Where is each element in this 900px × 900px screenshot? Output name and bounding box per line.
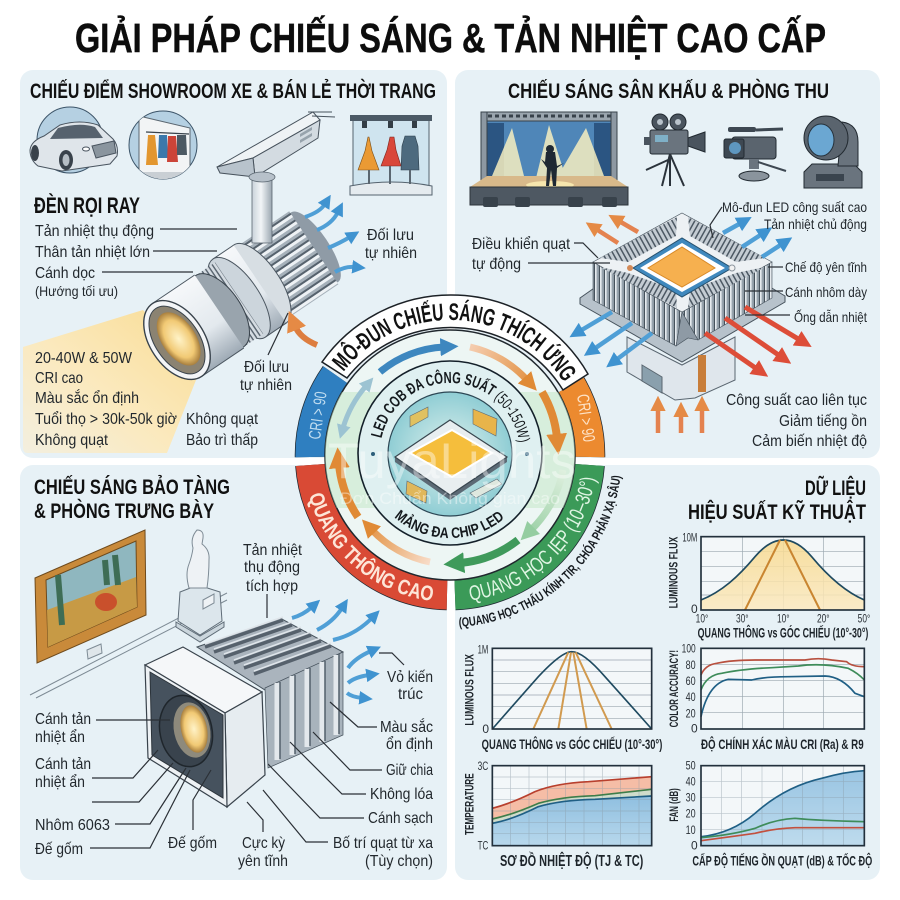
labels: fixture: yên tĩnh [238,853,288,870]
ring segment: narrow optics green [455,465,590,595]
watermark tint [323,392,577,508]
labels: track light: tự nhiên [365,245,417,262]
chart: fan noise: 40 [686,775,696,789]
labels: track light: Màu sắc ổn định [35,388,139,407]
labels: track light: Thân tản nhiệt lớn [35,244,150,261]
text: high flux: QUANG THÔNG CAO [307,493,433,600]
labels: fixture: Màu sắc [380,717,433,736]
wall line [30,593,227,698]
chart: fan noise [667,759,872,869]
labels: fixture: (Tùy chọn) [365,853,433,870]
chart: color accuracy: 20 [686,706,696,720]
inner disc [325,330,575,580]
ring arrow: orange upper [470,347,527,380]
heading: museum: & PHÒNG TRƯNG BÀY [34,499,214,523]
banner: adaptive module [322,295,588,390]
panel: showroom and retail [20,70,447,458]
text: module title: MÔ-ĐUN CHIẾU SÁNG THÍCH ỨNG [332,300,576,380]
arrows: rising convection [305,204,355,272]
chart: temperature [463,759,652,870]
labels: heat sink: Giảm tiếng ồn [779,413,867,430]
text: CRI left: CRI > 90 [305,390,331,441]
icon: luxury car [30,107,118,173]
illustration: heat sink module [580,213,785,400]
labels: fixture: Nhôm 6063 [35,817,110,834]
chart: luminous flux left [463,642,662,752]
heading: museum [34,476,230,523]
labels: heat sink: Chế độ yên tĩnh [785,259,867,275]
icon: film camera [644,114,705,186]
heading: museum: CHIẾU SÁNG BẢO TÀNG [34,476,230,499]
labels: track light: Đối lưu [367,227,414,244]
text: multi-chip array: MẢNG ĐA CHIP LED [394,510,503,538]
chart: luminous flux top: 20° [817,611,830,625]
illustration: architectural fixture [145,617,343,807]
chart: luminous flux top: 0 [691,602,698,616]
chart: fan noise: 20 [686,807,696,821]
arrows: exhaust orange [596,221,702,433]
labels: fixture: Đế gốm [35,841,83,858]
chart: temperature: SƠ ĐỒ NHIỆT ĐỘ (TJ & TC) [500,851,643,870]
labels: fixture: Bố trí quạt từ xa [333,835,433,852]
labels: track light: Tuổi thọ > 30k-50k giờ [35,410,177,428]
icon: concert stage [470,112,628,207]
ring segment: CRI orange [571,385,590,457]
labels: fixture: Cánh sạch [368,810,433,827]
panel: technical performance data [455,465,880,880]
labels: track light: CRI cao [35,370,83,387]
chart: luminous flux left: 0 [482,722,489,736]
watermark text: TuyaLights [328,433,576,489]
heading: data [688,476,866,524]
chart: color accuracy: COLOR ACCURACY! [667,650,681,727]
labels: track light: Cánh dọc [35,265,95,282]
charts group [463,530,872,870]
text: narrow optics: QUANG HỌC IẸP (10–30°) [470,478,599,604]
ring segment: CRI blue [310,375,335,457]
text: optics note: (QUANG HỌC THẤU KÍNH TIR, CHÓA PHẢN XẠ SÂU) [459,476,624,630]
ring arrow: orange right [542,392,557,438]
heading: stage: CHIẾU SÁNG SÂN KHẤU & PHÒNG THU [508,79,829,103]
icon: video camera [724,127,786,181]
labels: heat sink: Tản nhiệt chủ động [764,216,867,232]
icon: display case with mannequins [350,115,432,195]
labels: track light [34,193,417,449]
labels: track light: (Hướng tối ưu) [35,283,118,299]
chart: color accuracy [667,642,864,752]
chart: color accuracy: 80 [686,658,696,672]
chart: temperature: TC [478,839,489,853]
labels: fixture: trúc [398,686,423,703]
icon: clothing store [129,111,198,180]
labels: heat sink: Cảm biến nhiệt độ [752,433,867,450]
text: multi-power COB: LED COB ĐA CÔNG SUẤT (50-150W) [370,370,530,442]
labels: heat sink: Điều khiển quạt [472,235,570,253]
band disc [358,361,542,545]
chart: fan noise: FAN (dB) [667,788,681,822]
panel: stage and studio [455,70,880,458]
labels: fixture: Tản nhiệt [243,542,302,559]
watermark text: Đơn Chuẩn Không gian cao [340,489,560,508]
chart: color accuracy: 40 [686,690,696,704]
panel: museum and gallery [20,465,447,880]
illustration: track spotlight [128,112,353,394]
lamp beam [23,310,200,453]
labels: fixture: ổn định [386,735,433,753]
labels: fixture: Cánh tản [35,756,91,773]
arrows: exhaust blue [580,223,782,360]
labels: track light: tự nhiên [240,377,292,394]
chart: luminous flux top: 10° [696,611,708,625]
ring arrow: orange lower [372,530,430,562]
heading: showroom: CHIẾU ĐIỂM SHOWROOM XE & BÁN LẺ THỜI TRANG [30,79,436,103]
chart: color accuracy: 0 [691,722,698,736]
labels: fixture [35,542,433,870]
chart: luminous flux top: 10M [682,530,697,544]
icon: moving head light [804,116,862,188]
chart: color accuracy: 60 [686,674,696,688]
labels: fixture: Đế gốm [168,835,217,852]
icon: framed painting [35,530,146,663]
labels: heat sink: Mô-đun LED công suất cao [722,199,867,215]
labels: fixture: nhiệt ẩn [35,773,85,791]
labels: track light: Bảo trì thấp [186,432,258,449]
labels: fixture: Giữ chia [386,762,433,779]
labels: fixture: Cánh tản [35,711,91,728]
labels: track light: 20-40W & 50W [35,350,133,367]
chart: luminous flux top: 50° [858,611,870,625]
labels: heat sink: Cánh nhôm dày [785,284,867,300]
labels: heat sink: Công suất cao liên tục [726,392,867,409]
chart: luminous flux left: QUANG THÔNG vs GÓC CHIẾU (10°-30°) [482,735,662,752]
icon: statue on pedestal [176,530,224,642]
chart: fan noise: 50 [686,759,696,773]
arrows: fixture airflow [292,607,372,698]
chart: fan noise: 0 [691,838,698,852]
ring arrow: pale green [531,470,563,530]
central adaptive module ring [294,294,624,630]
labels: fixture: nhiệt ẩn [35,728,85,746]
labels: track light: Không quạt [186,411,258,428]
labels: fixture: tích hợp [246,578,298,595]
labels: track light: Đối lưu [244,359,289,376]
chart: fan noise: 30 [686,791,696,805]
heading: data: DỮ LIỆU [805,476,866,500]
arrow: lower convection [295,326,317,345]
labels: heat sink: Ống dẫn nhiệt [794,308,867,325]
icon: COB LED chip [371,407,529,503]
chart: temperature: 3C [478,759,489,773]
chart: fan noise: 10 [686,823,696,837]
chart: color accuracy: 100 [682,642,696,656]
labels: heat sink: tự động [472,256,521,273]
arrows: exhaust red [705,307,800,369]
ring arrow: orange left [339,464,358,517]
ring arrow: pale blue double [343,386,366,428]
chart: luminous flux top: 10° [777,611,790,625]
labels: fixture: thụ động [244,559,300,576]
labels: fixture: Không lóa [370,786,433,803]
text: CRI right: CRI > 90 [573,393,599,443]
chart: luminous flux left: 1M [478,642,488,656]
labels: track light: Tản nhiệt thụ động [35,223,154,240]
labels: track light: ĐÈN RỌI RAY [34,193,140,218]
chart: luminous flux top: LUMINOUS FLUX [667,537,681,608]
chart: luminous flux left: LUMINOUS FLUX [463,654,477,726]
ring arrow: blue [380,347,444,372]
chart: temperature: TEMPERATURE [463,773,477,835]
labels: track light: Không quạt [35,432,108,449]
chart: luminous flux top [667,530,870,641]
labels: heat sink [472,199,867,450]
chart: luminous flux top: 30° [736,611,749,625]
core disc [388,392,512,516]
ring arrow: green [460,540,518,563]
labels: fixture: Cực kỳ [242,835,285,852]
ring segment: high flux red [310,465,447,595]
labels: fixture: Vỏ kiến [387,669,433,686]
